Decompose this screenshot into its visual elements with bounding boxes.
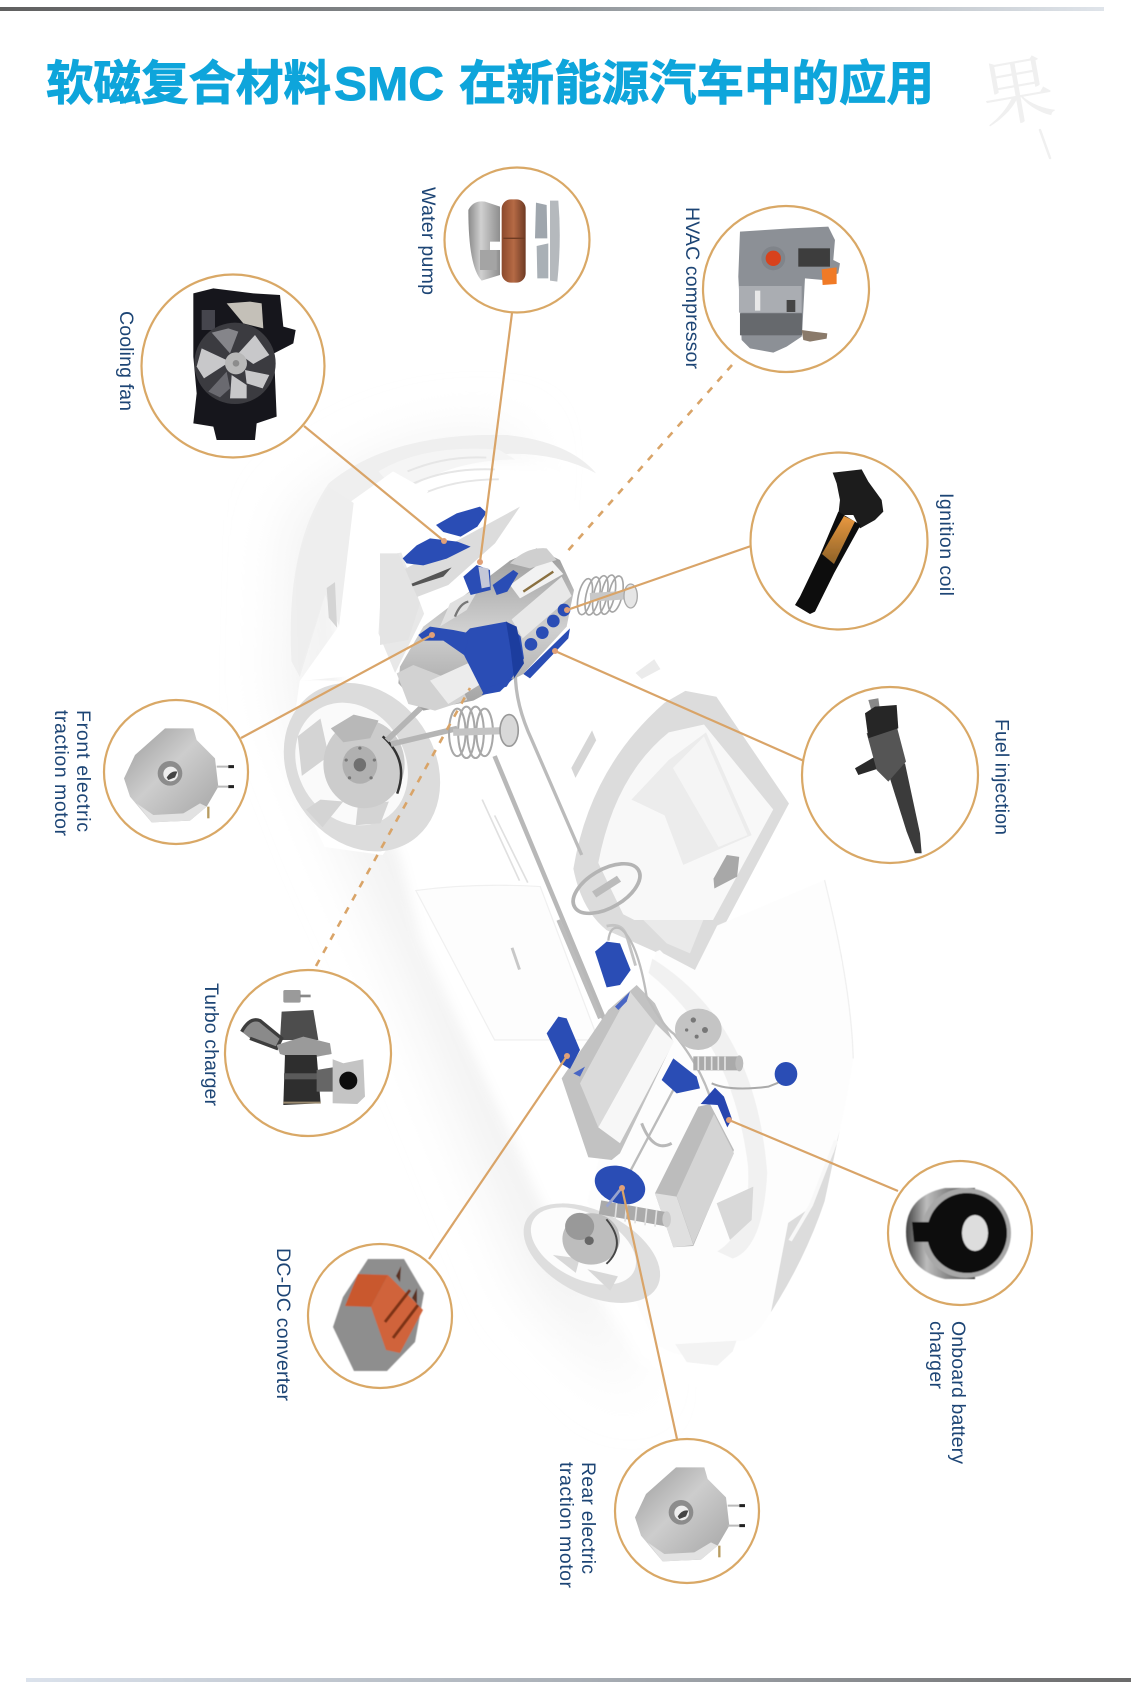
callout: cooling fan xyxy=(115,274,324,458)
radiator plate xyxy=(389,507,520,598)
label xyxy=(50,710,94,836)
icon: radiator fan xyxy=(193,288,296,440)
label: Fuel injection xyxy=(990,719,1012,835)
door lower corner xyxy=(630,920,720,970)
blue upper inverters xyxy=(463,565,491,595)
steering column xyxy=(495,756,607,1025)
blue block upper xyxy=(595,942,631,987)
blue charger connector xyxy=(701,1088,732,1127)
bottom bar xyxy=(26,1678,1131,1682)
blue rear motor xyxy=(589,1159,651,1211)
callout: onboard battery charger xyxy=(888,1161,1032,1464)
icon: turbocharger xyxy=(242,990,365,1105)
main cylinder xyxy=(398,548,574,711)
icon: pot core xyxy=(906,1188,1011,1279)
leader: onboard charger xyxy=(729,1120,898,1191)
blue block DC-DC xyxy=(547,1017,580,1069)
leader: cooling fan xyxy=(304,426,444,541)
label: traction motor xyxy=(50,710,72,836)
leader lines xyxy=(241,313,898,1439)
leader: front motor xyxy=(241,635,432,738)
steering column xyxy=(558,920,600,1018)
callout: onboard battery charger: charger xyxy=(925,1321,947,1390)
door handle xyxy=(714,855,739,889)
label: Onboard battery xyxy=(947,1321,969,1464)
icon: motor xyxy=(635,1467,745,1561)
rear shell xyxy=(587,880,853,1356)
car rear section xyxy=(505,880,853,1366)
label: DC-DC converter xyxy=(272,1248,294,1402)
callout: DC-DC converter xyxy=(272,1244,452,1402)
arch glass xyxy=(717,1187,753,1240)
battery front xyxy=(562,985,673,1160)
leader: HVAC compressor xyxy=(565,365,732,554)
front wheel xyxy=(254,657,470,878)
leader: turbo charger xyxy=(316,688,470,966)
label: Water pump xyxy=(417,187,439,295)
label: HVAC compressor xyxy=(681,207,703,370)
white bars xyxy=(510,557,563,598)
callout: rear electric traction motor xyxy=(555,1439,759,1588)
car illustration xyxy=(254,435,853,1400)
blue injectors xyxy=(525,604,570,651)
label: Turbo charger xyxy=(200,983,222,1106)
rear spring lower xyxy=(600,1207,667,1219)
icon: water pump parts xyxy=(468,199,560,283)
callout: front electric traction motor xyxy=(50,700,248,844)
icon: ignition coil xyxy=(795,469,883,614)
icon: fuel injector xyxy=(855,698,922,853)
car soft shadow xyxy=(285,437,640,1400)
watermark: 果 xyxy=(972,29,1061,144)
door frame xyxy=(573,691,789,972)
leader: water pump xyxy=(480,313,512,562)
engine assembly xyxy=(380,507,637,711)
icon: motor xyxy=(124,728,234,822)
leader: rear motor xyxy=(622,1188,677,1439)
front bumper xyxy=(291,435,596,677)
rear spring upper xyxy=(693,1042,738,1084)
label: Cooling fan xyxy=(115,311,137,411)
top bar xyxy=(0,7,1104,11)
title: SMC xyxy=(334,58,444,111)
blue motor mid xyxy=(662,1058,700,1093)
callout: water pump xyxy=(417,168,590,312)
axle xyxy=(387,697,457,744)
callout: HVAC compressor xyxy=(681,206,869,372)
front spring xyxy=(449,707,511,758)
air intake xyxy=(379,552,424,673)
callout: fuel injection xyxy=(802,687,1012,863)
rod xyxy=(630,1090,673,1172)
leader: ignition coil xyxy=(567,546,751,610)
title: 软磁复合材料 xyxy=(46,58,331,111)
vent xyxy=(571,730,596,778)
title: 在新能源汽车中的应用 xyxy=(459,58,934,111)
icon: DC-DC core xyxy=(333,1259,424,1371)
label: Front electric xyxy=(72,710,94,832)
label: Rear electric xyxy=(577,1462,599,1574)
icon: compressor xyxy=(738,227,840,353)
callout: turbo charger xyxy=(200,970,391,1136)
blue lower strip xyxy=(523,628,570,678)
rear lamp xyxy=(771,1130,840,1312)
rear wheel xyxy=(505,1183,679,1324)
rear gear xyxy=(675,1009,722,1050)
leader: fuel injection xyxy=(555,651,804,761)
rear powertrain xyxy=(547,920,797,1247)
floor panel xyxy=(416,885,598,1040)
callout: rear electric traction motor: traction motor xyxy=(555,1462,577,1588)
callout: ignition coil xyxy=(750,452,957,630)
car front section xyxy=(254,435,789,1040)
battery rear xyxy=(655,1104,734,1247)
body left white xyxy=(287,680,441,855)
cables xyxy=(608,928,710,1097)
blue large inverter xyxy=(462,622,524,693)
lower block xyxy=(397,665,467,711)
steering wheel xyxy=(564,854,649,924)
blue end cap xyxy=(775,1062,797,1086)
right spring xyxy=(575,574,626,616)
leader: DC-DC converter xyxy=(429,1056,567,1259)
blue fan blobs xyxy=(436,507,487,537)
label: Ignition coil xyxy=(935,493,957,596)
